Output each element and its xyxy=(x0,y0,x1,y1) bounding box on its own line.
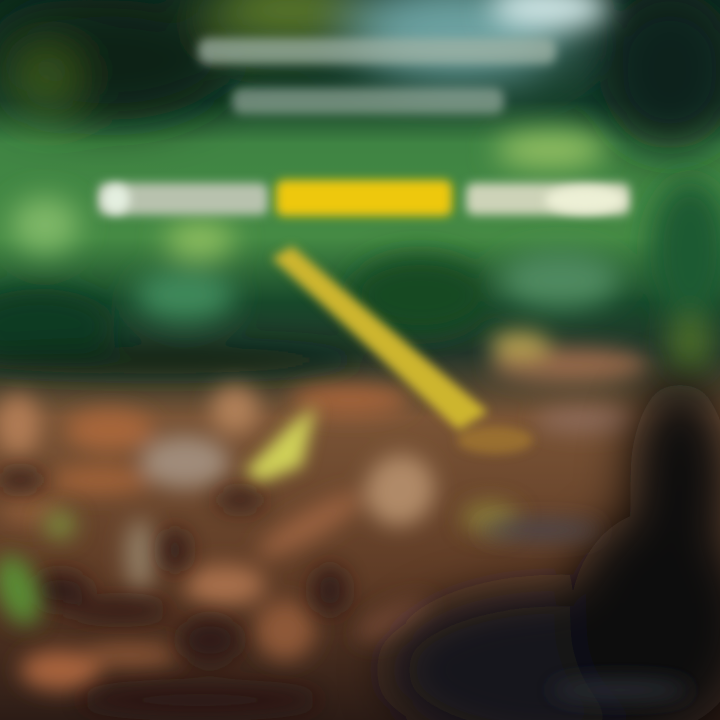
mid garden foliage xyxy=(0,132,720,375)
title line 2 xyxy=(232,88,504,114)
small seedlings xyxy=(0,502,518,631)
title line 1 xyxy=(198,38,556,64)
dark soil corner xyxy=(390,380,720,720)
banner right segment xyxy=(466,183,630,215)
dark gaps between mulch xyxy=(0,470,348,714)
banner right highlight xyxy=(545,186,625,214)
canopy and sky xyxy=(0,0,720,150)
yellow arrow xyxy=(272,246,533,454)
banner left highlight xyxy=(102,184,130,214)
title bars: text illegible in the reference xyxy=(198,38,556,114)
banner centre yellow segment xyxy=(276,180,452,216)
mulch ground xyxy=(0,331,650,690)
banner strip xyxy=(98,180,630,216)
sky highlight xyxy=(490,0,610,30)
banner left segment xyxy=(98,183,268,215)
yellow-green leaf xyxy=(244,406,316,482)
soil highlights xyxy=(480,521,690,700)
